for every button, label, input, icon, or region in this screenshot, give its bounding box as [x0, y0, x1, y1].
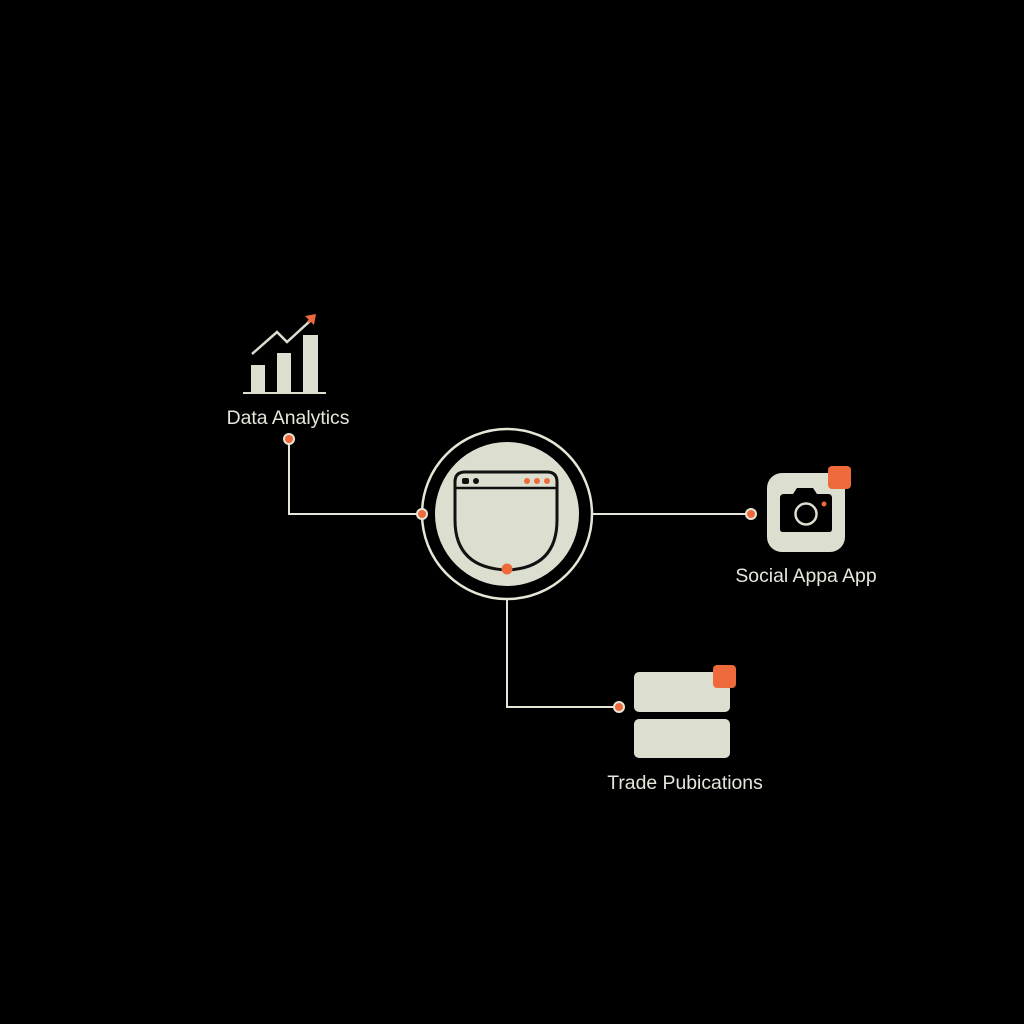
connector lines [289, 439, 751, 707]
connector dots [284, 434, 756, 712]
icon: data analytics chart [243, 314, 326, 393]
label: Trade Pubications: Trade Pubications [607, 772, 763, 794]
label: Social Appa App: Social Appa App [735, 565, 877, 587]
icon: social camera app [767, 466, 851, 552]
icon: trade publications [634, 665, 736, 758]
icon: browser shield [455, 472, 557, 570]
central hub [422, 429, 592, 599]
label: Data Analytics: Data Analytics [227, 407, 349, 429]
